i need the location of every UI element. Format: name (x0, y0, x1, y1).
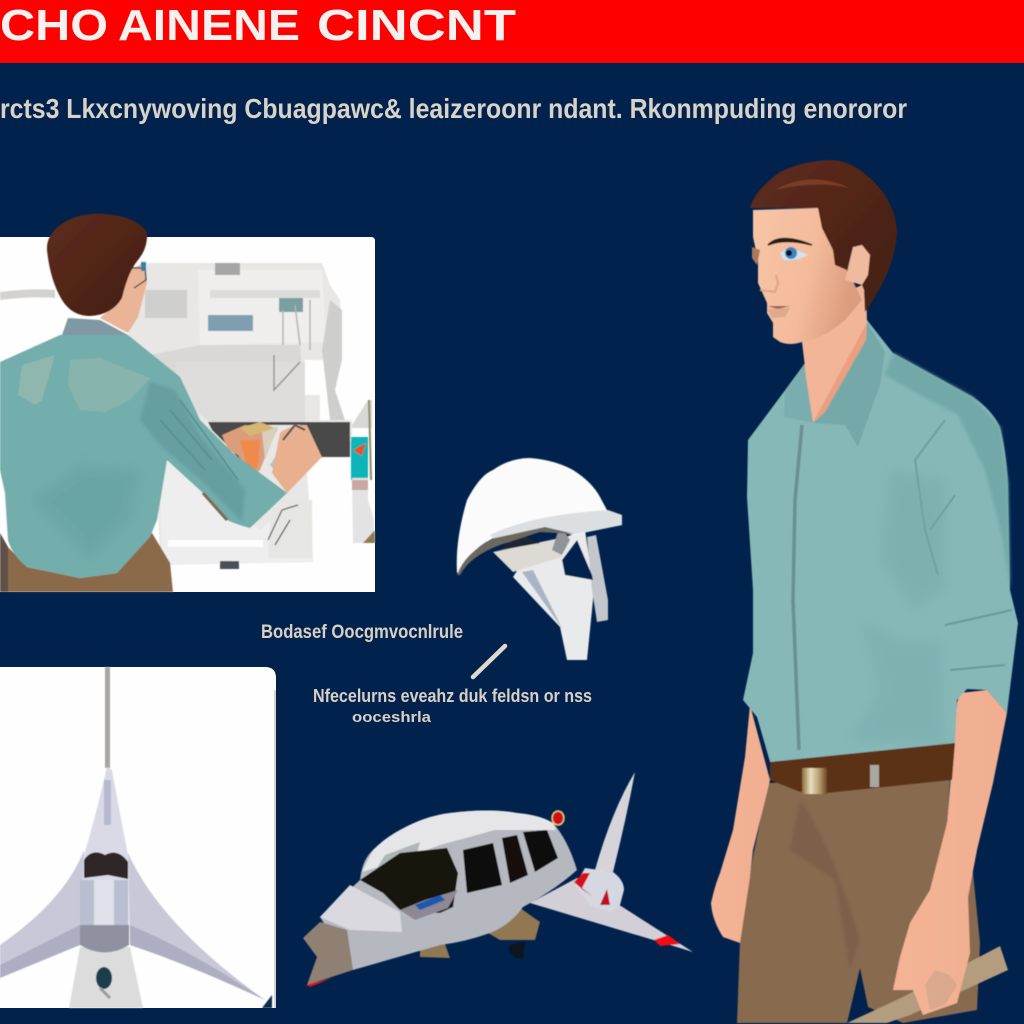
canopy top (362, 810, 556, 872)
panel: technician at machine (0, 214, 375, 592)
aircraft top view (0, 667, 272, 1008)
shirt placket (793, 425, 802, 750)
trouser shading (790, 800, 860, 970)
title banner (0, 0, 1024, 63)
engine nacelle (574, 868, 624, 912)
helmet illustration (457, 458, 622, 660)
belt (770, 743, 955, 793)
technician figure (0, 214, 322, 592)
wing tip marking (654, 935, 680, 946)
title (0, 1, 516, 50)
face (753, 208, 862, 344)
hair (750, 160, 897, 312)
ear (845, 245, 870, 285)
beacon light (552, 811, 564, 825)
callout text: lower label: ooceshrla (352, 709, 432, 726)
title: CHO (0, 1, 108, 50)
callout text: lower label (313, 686, 592, 726)
collar (813, 322, 885, 447)
title: CINCNT (317, 1, 516, 50)
trousers (737, 778, 980, 1023)
hand tool (847, 946, 1008, 1023)
far eye (752, 247, 760, 265)
nose cone (303, 922, 353, 985)
nose and lips (760, 275, 790, 318)
shirt shoulder shade (885, 353, 1010, 590)
aircraft perspective illustration (303, 772, 693, 987)
tail fin (595, 772, 635, 872)
knuckle detail (925, 970, 957, 1010)
shirt (743, 320, 1018, 762)
fuselage (320, 810, 577, 970)
wing (530, 878, 693, 952)
callout leader line (473, 646, 505, 677)
neck (802, 283, 867, 423)
main figure: engineer (711, 160, 1018, 1023)
callout text: upper label: Bodasef Oocgmvocnlrule (261, 622, 463, 643)
helmet straps and chin guard (493, 525, 608, 660)
subtitle text: rcts3 Lkxcnywoving Cbuagpawc& leaizeroonr ndant. Rkonmpuding enororor (0, 93, 907, 124)
far arm and hand (893, 690, 1007, 1015)
title: AINENE (118, 1, 300, 50)
helmet dome (457, 458, 622, 573)
callout text: lower label: Nfecelurns eveahz duk feldsn or nss (313, 686, 592, 706)
belt buckle (802, 768, 827, 794)
panel: top view of aircraft (0, 667, 276, 1008)
landing gear (420, 908, 540, 958)
fuselage nose panel (320, 885, 402, 932)
belt loop (870, 765, 879, 787)
eye (780, 247, 808, 260)
eyebrow (768, 238, 812, 245)
sleeve folds (915, 420, 955, 575)
cockpit windows (360, 830, 558, 920)
machine illustration (0, 263, 375, 569)
near arm (711, 705, 770, 943)
